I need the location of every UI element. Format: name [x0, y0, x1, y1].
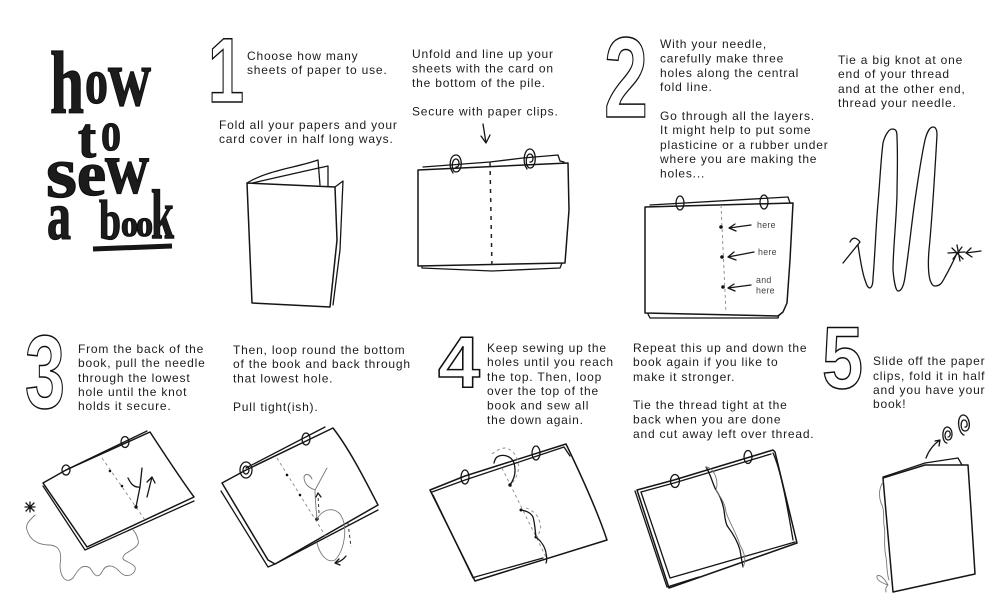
illustration: book with three holes: and — [756, 275, 772, 285]
illustration: loop around the bottom — [221, 427, 378, 567]
text: repeat and tie: book again if you like to — [633, 355, 778, 369]
illustration: book with three holes: here — [758, 247, 777, 257]
text: make three holes: carefully make three — [660, 52, 784, 66]
illustration: book with three holes — [645, 195, 793, 318]
illustration: folded papers — [247, 160, 343, 307]
text: choose sheets — [247, 49, 387, 77]
text: pull needle through: book, pull the needle — [78, 356, 206, 370]
text: loop round the bottom — [233, 343, 411, 414]
text: keep sewing: the down again. — [487, 413, 584, 427]
text: make three holes: Go through all the layers. — [660, 109, 815, 123]
text: pull needle through — [78, 342, 206, 413]
text: make three holes: holes along the central — [660, 66, 799, 80]
text: unfold and secure: Unfold and line up your — [412, 47, 554, 61]
text: make three holes: plasticine or a rubber under — [660, 138, 828, 152]
text: slide off clips: book! — [873, 397, 906, 411]
title: how to sew a book: k — [151, 177, 174, 254]
text: unfold and secure: Secure with paper clips. — [412, 104, 559, 118]
text: fold papers — [219, 118, 398, 146]
text: unfold and secure: sheets with the card on — [412, 62, 554, 76]
text: pull needle through: through the lowest — [78, 371, 190, 385]
text: keep sewing: over the top of the — [487, 384, 599, 398]
text: tie a knot: and at the other end, — [838, 82, 966, 96]
step number 1: 1 — [208, 20, 244, 122]
text: pull needle through: holds it secure. — [78, 399, 172, 413]
text: repeat and tie: Tie the thread tight at the — [633, 398, 788, 412]
illustration: open pile with clips — [418, 149, 569, 271]
text: keep sewing: book and sew all — [487, 398, 589, 412]
text: make three holes: fold line. — [660, 80, 713, 94]
text: repeat and tie: back when you are done — [633, 412, 781, 426]
text: make three holes: where you are making the — [659, 152, 817, 166]
text: keep sewing: Keep sewing up the — [487, 341, 607, 355]
text: tie a knot: end of your thread — [838, 67, 950, 81]
text: make three holes: holes... — [660, 166, 705, 180]
text: unfold and secure — [412, 47, 559, 118]
text: make three holes: With your needle, — [660, 37, 767, 51]
text: choose sheets: sheets of paper to use. — [247, 63, 387, 77]
text: repeat and tie: Repeat this up and down the — [633, 341, 807, 355]
illustration: finished book with removed clips — [877, 415, 975, 592]
arrow: to paper clips — [481, 124, 490, 143]
text: tie a knot: Tie a big knot at one — [838, 53, 963, 67]
title: how to sew a book: b — [99, 190, 121, 252]
title: how to sew a book: a — [47, 178, 71, 254]
title: how to sew a book: s — [46, 132, 77, 213]
text: slide off clips — [873, 354, 985, 411]
text: pull needle through: From the back of the — [78, 342, 204, 356]
step number 4: 4 — [438, 323, 480, 403]
title: how to sew a book: w — [108, 33, 151, 123]
text: fold papers: card cover in half long ways. — [219, 132, 394, 146]
text: choose sheets: Choose how many — [247, 49, 358, 63]
text: slide off clips: clips, fold it in half — [873, 369, 985, 383]
text: unfold and secure: the bottom of the pile. — [412, 76, 546, 90]
text: make three holes — [659, 37, 828, 180]
text: keep sewing: holes until you reach — [487, 355, 614, 369]
text: keep sewing — [487, 341, 614, 427]
text: loop round the bottom: that lowest hole. — [233, 372, 333, 386]
title: how to sew a book: w — [105, 128, 149, 210]
text: slide off clips: Slide off the paper — [873, 354, 985, 368]
title: how to sew a book — [46, 33, 174, 254]
text: loop round the bottom: of the book and back through — [233, 357, 411, 371]
text: make three holes: It might help to put some — [660, 123, 811, 137]
step number 2: 2 — [604, 15, 648, 142]
text: slide off clips: and you have your — [873, 383, 985, 397]
title: how to sew a book: o — [121, 204, 138, 245]
text: repeat and tie: make it stronger. — [633, 370, 735, 384]
illustration: book with three holes: here — [756, 286, 775, 296]
text: repeat and tie: and cut away left over thread. — [633, 427, 814, 441]
text: loop round the bottom: Then, loop round the bottom — [233, 343, 405, 357]
title: how to sew a book: o — [101, 101, 121, 163]
step number 5: 5 — [822, 308, 863, 407]
title: how to sew a book: t — [78, 107, 96, 170]
illustration: threaded needle and knot — [843, 127, 981, 291]
text: pull needle through: hole until the knot — [78, 385, 187, 399]
title: how to sew a book: h — [50, 35, 84, 133]
text: tie a knot: thread your needle. — [838, 96, 957, 110]
title: how to sew a book: o — [136, 204, 153, 245]
text: fold papers: Fold all your papers and your — [219, 118, 398, 132]
illustration: sewing up to the top — [430, 444, 607, 581]
text: repeat and tie — [633, 341, 814, 441]
text: loop round the bottom: Pull tight(ish). — [233, 400, 318, 414]
illustration: fully sewn book — [635, 450, 797, 588]
title: how to sew a book: o — [85, 46, 108, 118]
step number 3: 3 — [25, 315, 65, 431]
text: keep sewing: the top. Then, loop — [487, 370, 602, 384]
title: how to sew a book: e — [77, 139, 106, 209]
illustration: book with three holes: here — [757, 220, 776, 230]
illustration: needle through lowest hole — [25, 431, 194, 580]
text: tie a knot — [838, 53, 966, 110]
